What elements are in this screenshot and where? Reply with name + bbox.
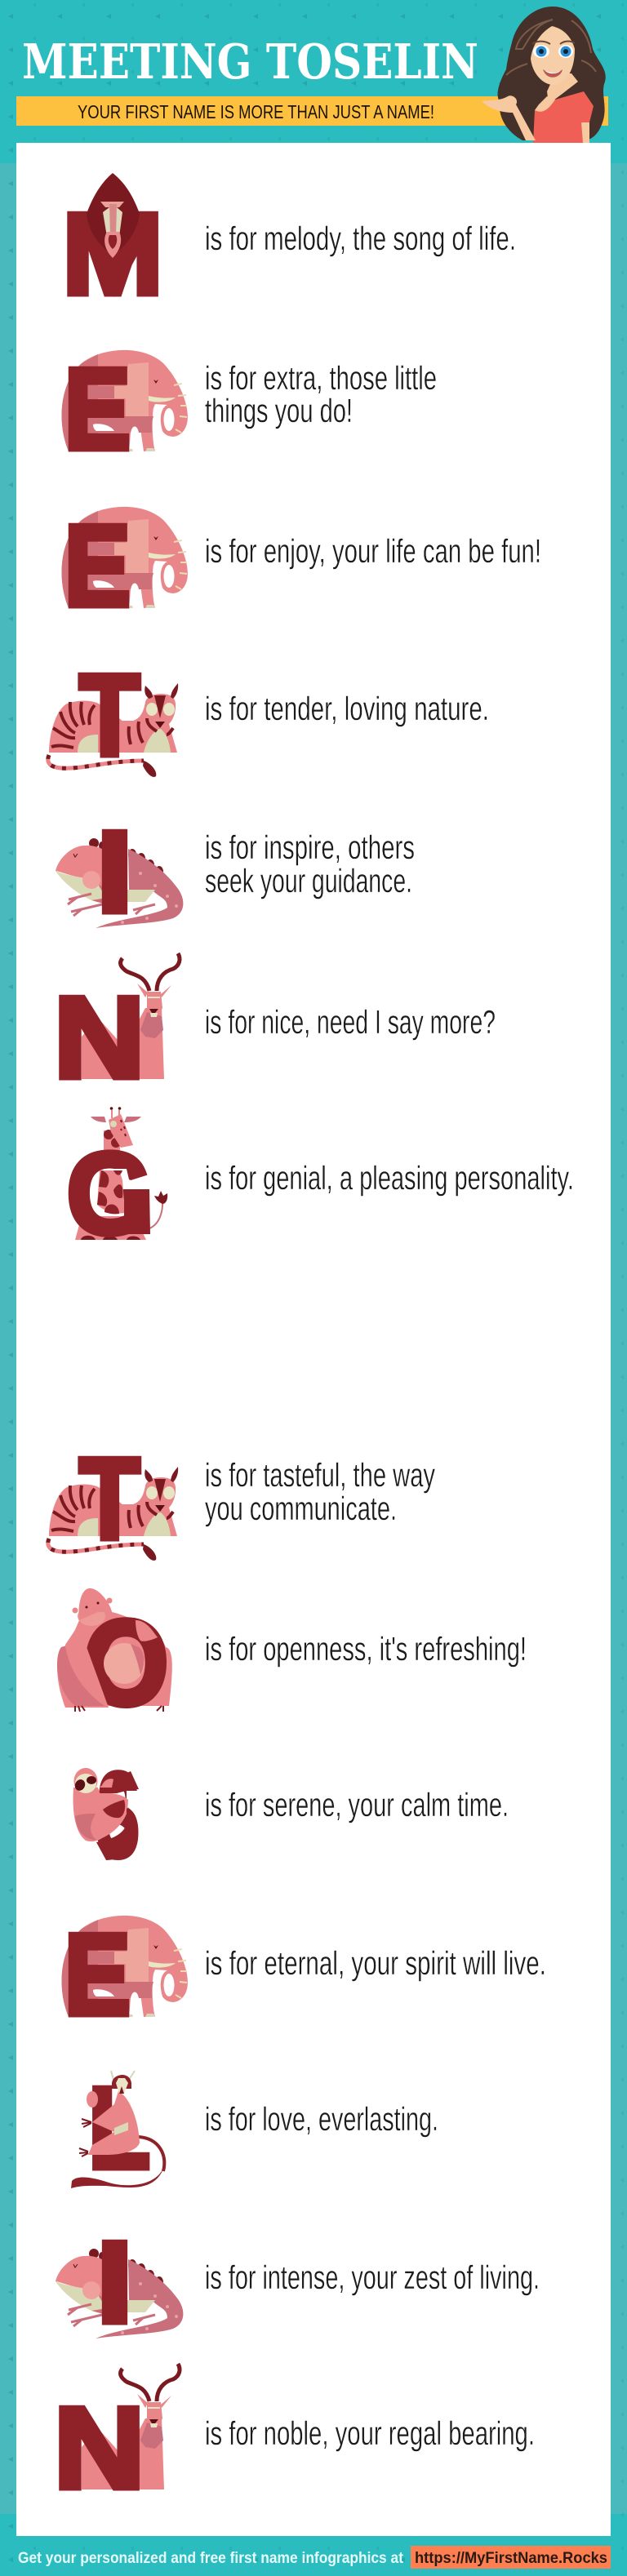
text: M line: is for melody, the song of life.: [205, 220, 516, 257]
icon: elephant letter E: E: [64, 501, 131, 631]
icon: gazelle letter N: N: [54, 974, 145, 1103]
footer call to action: [18, 2546, 611, 2569]
footer call to action: https://MyFirstName.Rocks: [415, 2550, 607, 2567]
icon: iguana letter I: I: [96, 807, 133, 937]
icon: elephant letter E: [62, 1910, 188, 2040]
text: I inspire lines: [205, 828, 415, 899]
text: E extra lines: things you do!: [205, 392, 353, 429]
text: T tasteful lines: [205, 1456, 435, 1527]
icon: gazelle letter N: N: [54, 2384, 145, 2513]
text: E extra lines: [205, 359, 437, 429]
text: T tender line: is for tender, loving nature.: [205, 690, 489, 727]
icon: elephant letter E: [62, 501, 188, 631]
text: T tasteful lines: is for tasteful, the way: [205, 1456, 435, 1494]
icon: lemur letter L: L: [88, 2064, 150, 2193]
row: E eternal: [62, 1910, 546, 2040]
text: I inspire lines: is for inspire, others: [205, 828, 415, 866]
title: MEETING TOSELIN: [22, 33, 478, 90]
row: I intense: [56, 2218, 540, 2347]
row: I inspire: [56, 807, 415, 937]
icon: elephant letter E: E: [64, 1910, 131, 2040]
row: N noble: [54, 2364, 535, 2513]
icon: giraffe letter G: G: [67, 1130, 152, 1259]
text: S serene line: is for serene, your calm time.: [205, 1786, 509, 1823]
row: N nice: [54, 953, 496, 1103]
icon: iguana letter I: I: [96, 2218, 133, 2347]
text: T tasteful lines: you communicate.: [205, 1490, 397, 1527]
icon: tiger letter T: T: [79, 651, 140, 780]
icon: mole letter O: O: [83, 1596, 168, 1730]
icon: elephant letter E: [62, 344, 188, 474]
icon: tiger letter T: T: [79, 1434, 140, 1564]
row: L love: [71, 2064, 438, 2193]
row: M: [62, 173, 516, 318]
icon: elephant letter E: E: [64, 344, 131, 474]
text: E extra lines: is for extra, those little: [205, 359, 437, 397]
row: G genial: [67, 1107, 574, 1259]
icon: baboon letter M: M: [62, 189, 163, 318]
icon: sloth letter S: S: [96, 1748, 140, 1881]
subtitle banner: YOUR FIRST NAME IS MORE THAN JUST A NAME!: [78, 101, 434, 122]
icon: iguana letter I: [56, 807, 183, 937]
row: S serene: [73, 1748, 509, 1881]
icon: sloth letter S: [73, 1748, 147, 1881]
icon: gazelle letter N: [54, 2364, 180, 2513]
subtitle banner: [16, 96, 608, 126]
icon: cartoon woman presenter: [482, 7, 606, 143]
icon: iguana letter I: [56, 2218, 183, 2347]
icon: gazelle letter N: [54, 953, 180, 1103]
row: E enjoy: [62, 501, 541, 631]
text: L love line: is for love, everlasting.: [205, 2100, 438, 2138]
row: T tasteful: [48, 1434, 435, 1564]
row: O openness: [57, 1588, 527, 1730]
icon: tiger letter T: [48, 651, 178, 780]
footer call to action: Get your personalized and free first name infographics at: [18, 2550, 404, 2567]
text: I inspire lines: seek your guidance.: [205, 862, 412, 899]
text: N nice line: is for nice, need I say more?: [205, 1003, 496, 1041]
row: E extra: [62, 344, 437, 474]
row: T tender: [48, 651, 489, 780]
icon: lemur letter L: [71, 2064, 164, 2193]
icon: tiger letter T: [48, 1434, 178, 1564]
